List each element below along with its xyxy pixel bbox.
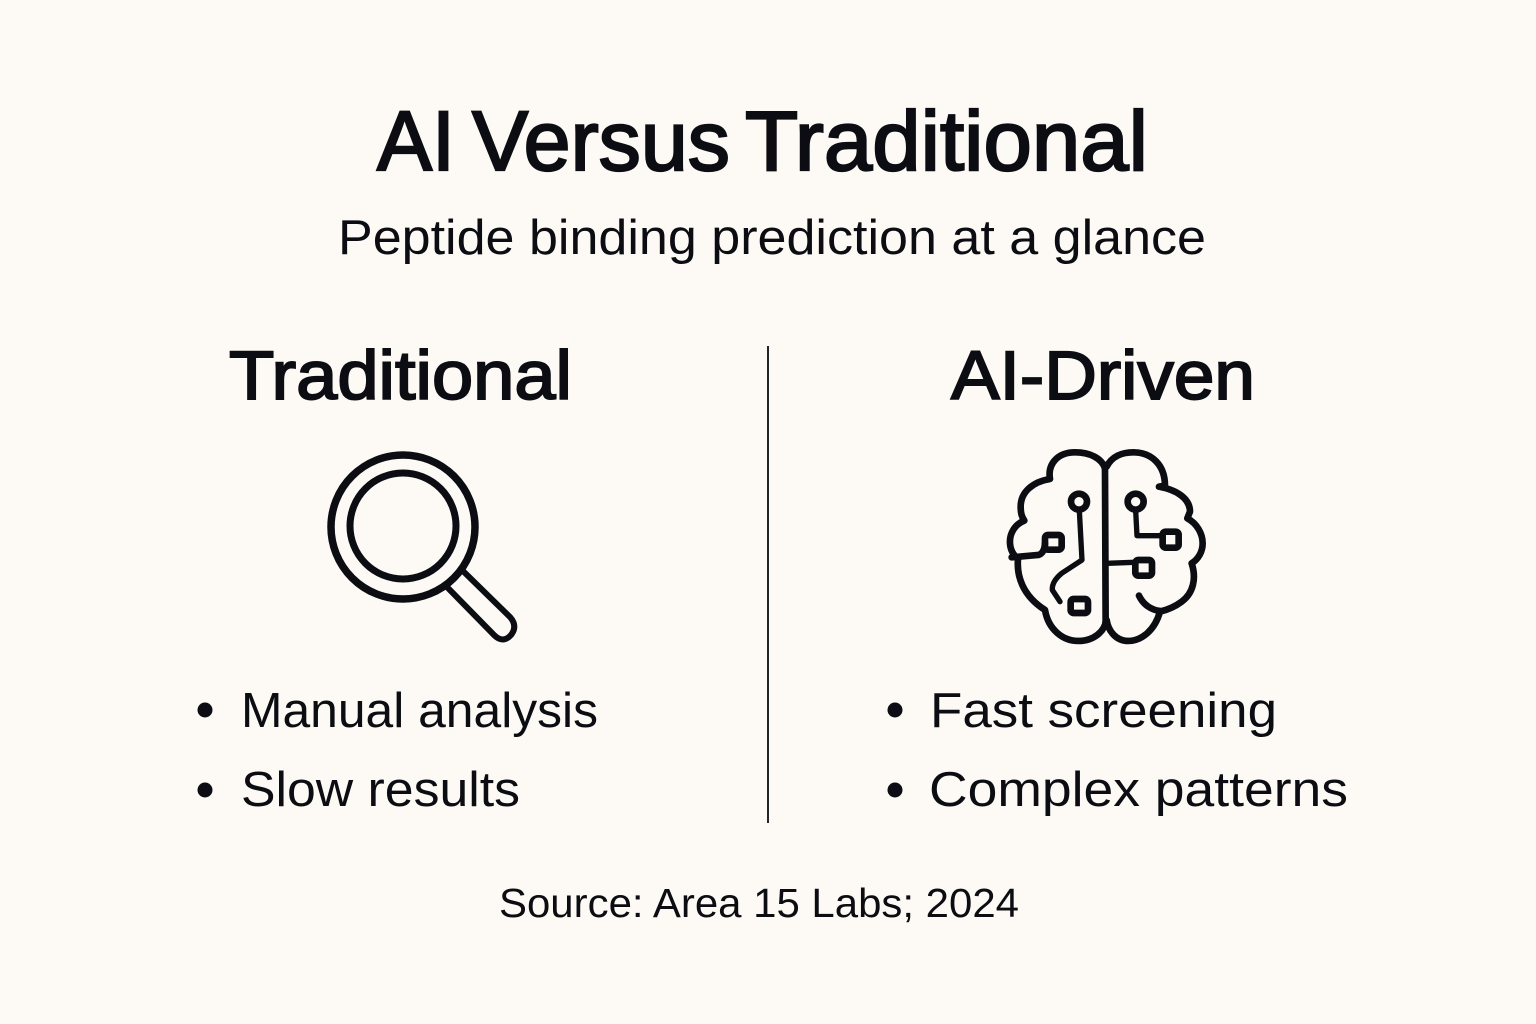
icon: magnifying glass xyxy=(331,455,514,640)
title xyxy=(377,94,1148,188)
title: Versus xyxy=(472,94,730,188)
bullet list: ai-driven xyxy=(888,684,1348,817)
bullet list: ai-driven: Fast screening xyxy=(930,684,1277,738)
heading: ai-driven: AI-Driven xyxy=(951,337,1255,414)
icon: brain with circuits xyxy=(1010,452,1203,641)
source note: Source: Area 15 Labs; 2024 xyxy=(499,880,1019,926)
bullet list: ai-driven: Complex patterns xyxy=(929,763,1348,817)
bullet list: traditional: Manual analysis xyxy=(241,684,598,738)
subtitle: Peptide binding prediction at a glance xyxy=(338,211,1206,265)
title: Traditional xyxy=(745,94,1148,188)
panel: traditional xyxy=(198,337,598,817)
title: AI xyxy=(377,94,455,188)
bullet list: traditional: Slow results xyxy=(241,763,520,817)
panel: ai-driven xyxy=(888,337,1348,817)
bullet list: traditional xyxy=(198,684,598,817)
heading: traditional: Traditional xyxy=(229,337,572,414)
